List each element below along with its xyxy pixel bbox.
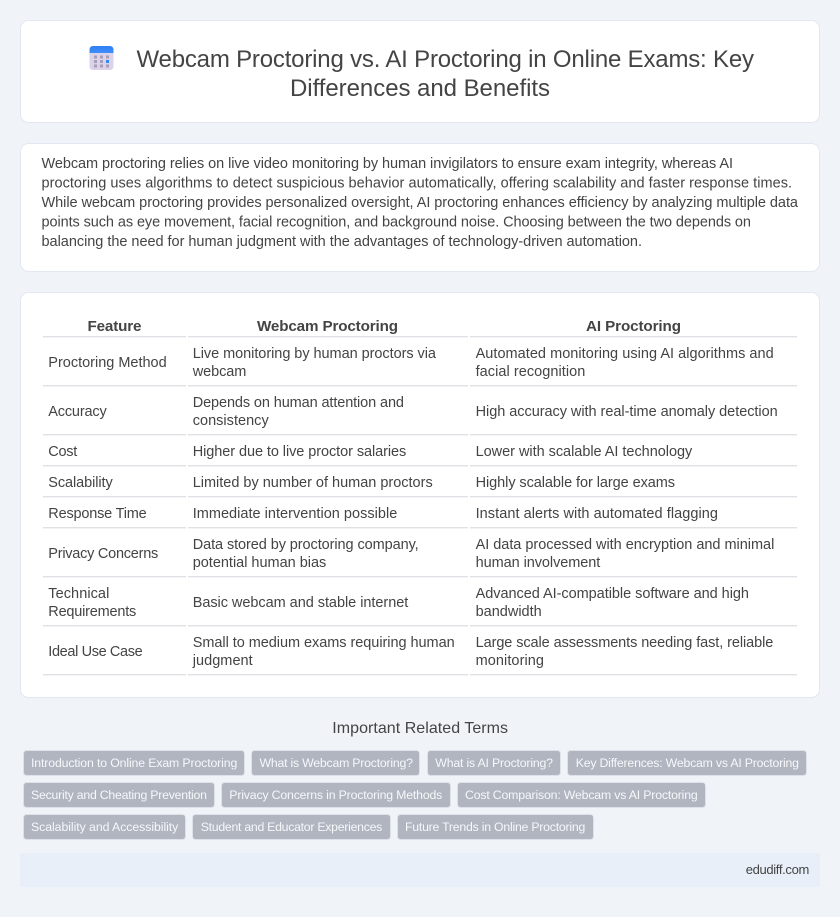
table row: privacy concerns: Data stored by proctoring company, bbox=[193, 537, 419, 553]
table row: technical requirements: Advanced AI-compatible software and high bbox=[476, 586, 749, 602]
tag: What is Webcam Proctoring? bbox=[260, 756, 413, 770]
tag: Key Differences: Webcam vs AI Proctoring bbox=[576, 756, 799, 770]
table row: cost: Cost bbox=[48, 444, 77, 460]
table row: response time bbox=[48, 506, 718, 522]
tag bbox=[568, 750, 806, 776]
title: Webcam Proctoring vs. AI Proctoring in Online Exams: Key bbox=[136, 46, 754, 73]
text block: introduction paragraph: Webcam proctoring relies on live video monitoring by human invigilators to ensure exam integrity, whereas AI bbox=[42, 156, 733, 172]
table row: scalability: Scalability bbox=[48, 475, 113, 491]
table row: technical requirements: Requirements bbox=[48, 604, 136, 620]
footer: edudiff.com bbox=[746, 862, 809, 877]
table row: proctoring method: Live monitoring by human proctors via bbox=[193, 346, 437, 362]
table header row: Feature bbox=[88, 318, 142, 335]
table row: privacy concerns: Privacy Concerns bbox=[48, 546, 158, 562]
panel: related term tags bbox=[24, 750, 806, 840]
footer bbox=[20, 853, 820, 887]
table row: proctoring method: Automated monitoring using AI algorithms and bbox=[476, 346, 774, 362]
table row: technical requirements: Technical bbox=[48, 586, 109, 602]
tag bbox=[192, 814, 390, 840]
tag: Privacy Concerns in Proctoring Methods bbox=[229, 788, 442, 802]
tag bbox=[458, 782, 706, 808]
table row: cost: Higher due to live proctor salaries bbox=[193, 444, 406, 460]
table row: ideal use case: Large scale assessments needing fast, reliable bbox=[476, 635, 773, 651]
tag: Student and Educator Experiences bbox=[201, 820, 382, 834]
table row: technical requirements bbox=[48, 586, 749, 620]
table row: scalability: Highly scalable for large exams bbox=[476, 475, 675, 491]
table row: proctoring method: webcam bbox=[192, 364, 246, 380]
tag bbox=[24, 750, 244, 776]
tag bbox=[222, 782, 450, 808]
tag: What is AI Proctoring? bbox=[435, 756, 553, 770]
tag: Scalability and Accessibility bbox=[31, 820, 179, 834]
table row: privacy concerns: AI data processed with encryption and minimal bbox=[476, 537, 774, 553]
tag: Cost Comparison: Webcam vs AI Proctoring bbox=[465, 788, 698, 802]
table row: accuracy: Depends on human attention and bbox=[193, 395, 404, 411]
table row: privacy concerns: potential human bias bbox=[193, 555, 326, 571]
text block: introduction paragraph bbox=[42, 156, 799, 250]
table row: ideal use case: judgment bbox=[192, 653, 253, 669]
table row: accuracy: Accuracy bbox=[48, 404, 107, 420]
table row: scalability bbox=[48, 475, 675, 491]
tag bbox=[24, 814, 186, 840]
table row: privacy concerns: human involvement bbox=[476, 555, 600, 571]
table row: response time: Instant alerts with automated flagging bbox=[476, 506, 718, 522]
tag bbox=[428, 750, 560, 776]
table row: proctoring method: Proctoring Method bbox=[48, 355, 167, 371]
table header row bbox=[88, 318, 681, 335]
table row: accuracy: consistency bbox=[193, 413, 269, 429]
tag bbox=[24, 782, 214, 808]
table row: accuracy: High accuracy with real-time anomaly detection bbox=[476, 404, 778, 420]
table row: ideal use case: monitoring bbox=[476, 653, 544, 669]
tag bbox=[398, 814, 594, 840]
table row: ideal use case: Ideal Use Case bbox=[48, 644, 143, 660]
table row: cost: Lower with scalable AI technology bbox=[476, 444, 693, 460]
table row: proctoring method: facial recognition bbox=[476, 364, 585, 380]
table row: ideal use case bbox=[48, 635, 773, 669]
tag: Security and Cheating Prevention bbox=[31, 788, 207, 802]
panel: introduction bbox=[20, 144, 820, 272]
tag: Introduction to Online Exam Proctoring bbox=[31, 756, 237, 770]
table row: technical requirements: bandwidth bbox=[476, 604, 542, 620]
table header row: AI Proctoring bbox=[586, 318, 681, 335]
text block: introduction paragraph: points such as eye movement, facial recognition, and background noise. Choosing between the two depends on bbox=[42, 214, 751, 230]
table row: ideal use case: Small to medium exams requiring human bbox=[193, 635, 455, 651]
text block: introduction paragraph: While webcam proctoring provides personalized oversight, AI proctoring enhances efficiency by analyzing multiple data bbox=[42, 195, 799, 211]
tag: Future Trends in Online Proctoring bbox=[405, 820, 585, 834]
icon: calendar bbox=[90, 46, 114, 70]
panel: page header bbox=[20, 20, 820, 122]
table row: proctoring method bbox=[48, 346, 774, 380]
table row: technical requirements: Basic webcam and stable internet bbox=[193, 595, 408, 611]
tag bbox=[252, 750, 420, 776]
table row: scalability: Limited by number of human proctors bbox=[193, 475, 433, 491]
title bbox=[136, 46, 754, 102]
table row: privacy concerns bbox=[48, 537, 774, 571]
heading: important related terms: Important Related Terms bbox=[332, 720, 508, 737]
text block: introduction paragraph: balancing the need for human judgment with the advantages of technology-driven automation. bbox=[42, 234, 642, 250]
table row: response time: Immediate intervention possible bbox=[193, 506, 397, 522]
table header row: Webcam Proctoring bbox=[257, 318, 398, 335]
text block: introduction paragraph: proctoring uses algorithms to detect suspicious behavior automatically, offering scalability and faster response times. bbox=[42, 176, 792, 192]
table row: cost bbox=[48, 444, 693, 460]
panel: comparison table bbox=[20, 292, 820, 698]
table row: accuracy bbox=[48, 395, 778, 429]
title: Differences and Benefits bbox=[290, 75, 550, 102]
table row: response time: Response Time bbox=[48, 506, 147, 522]
